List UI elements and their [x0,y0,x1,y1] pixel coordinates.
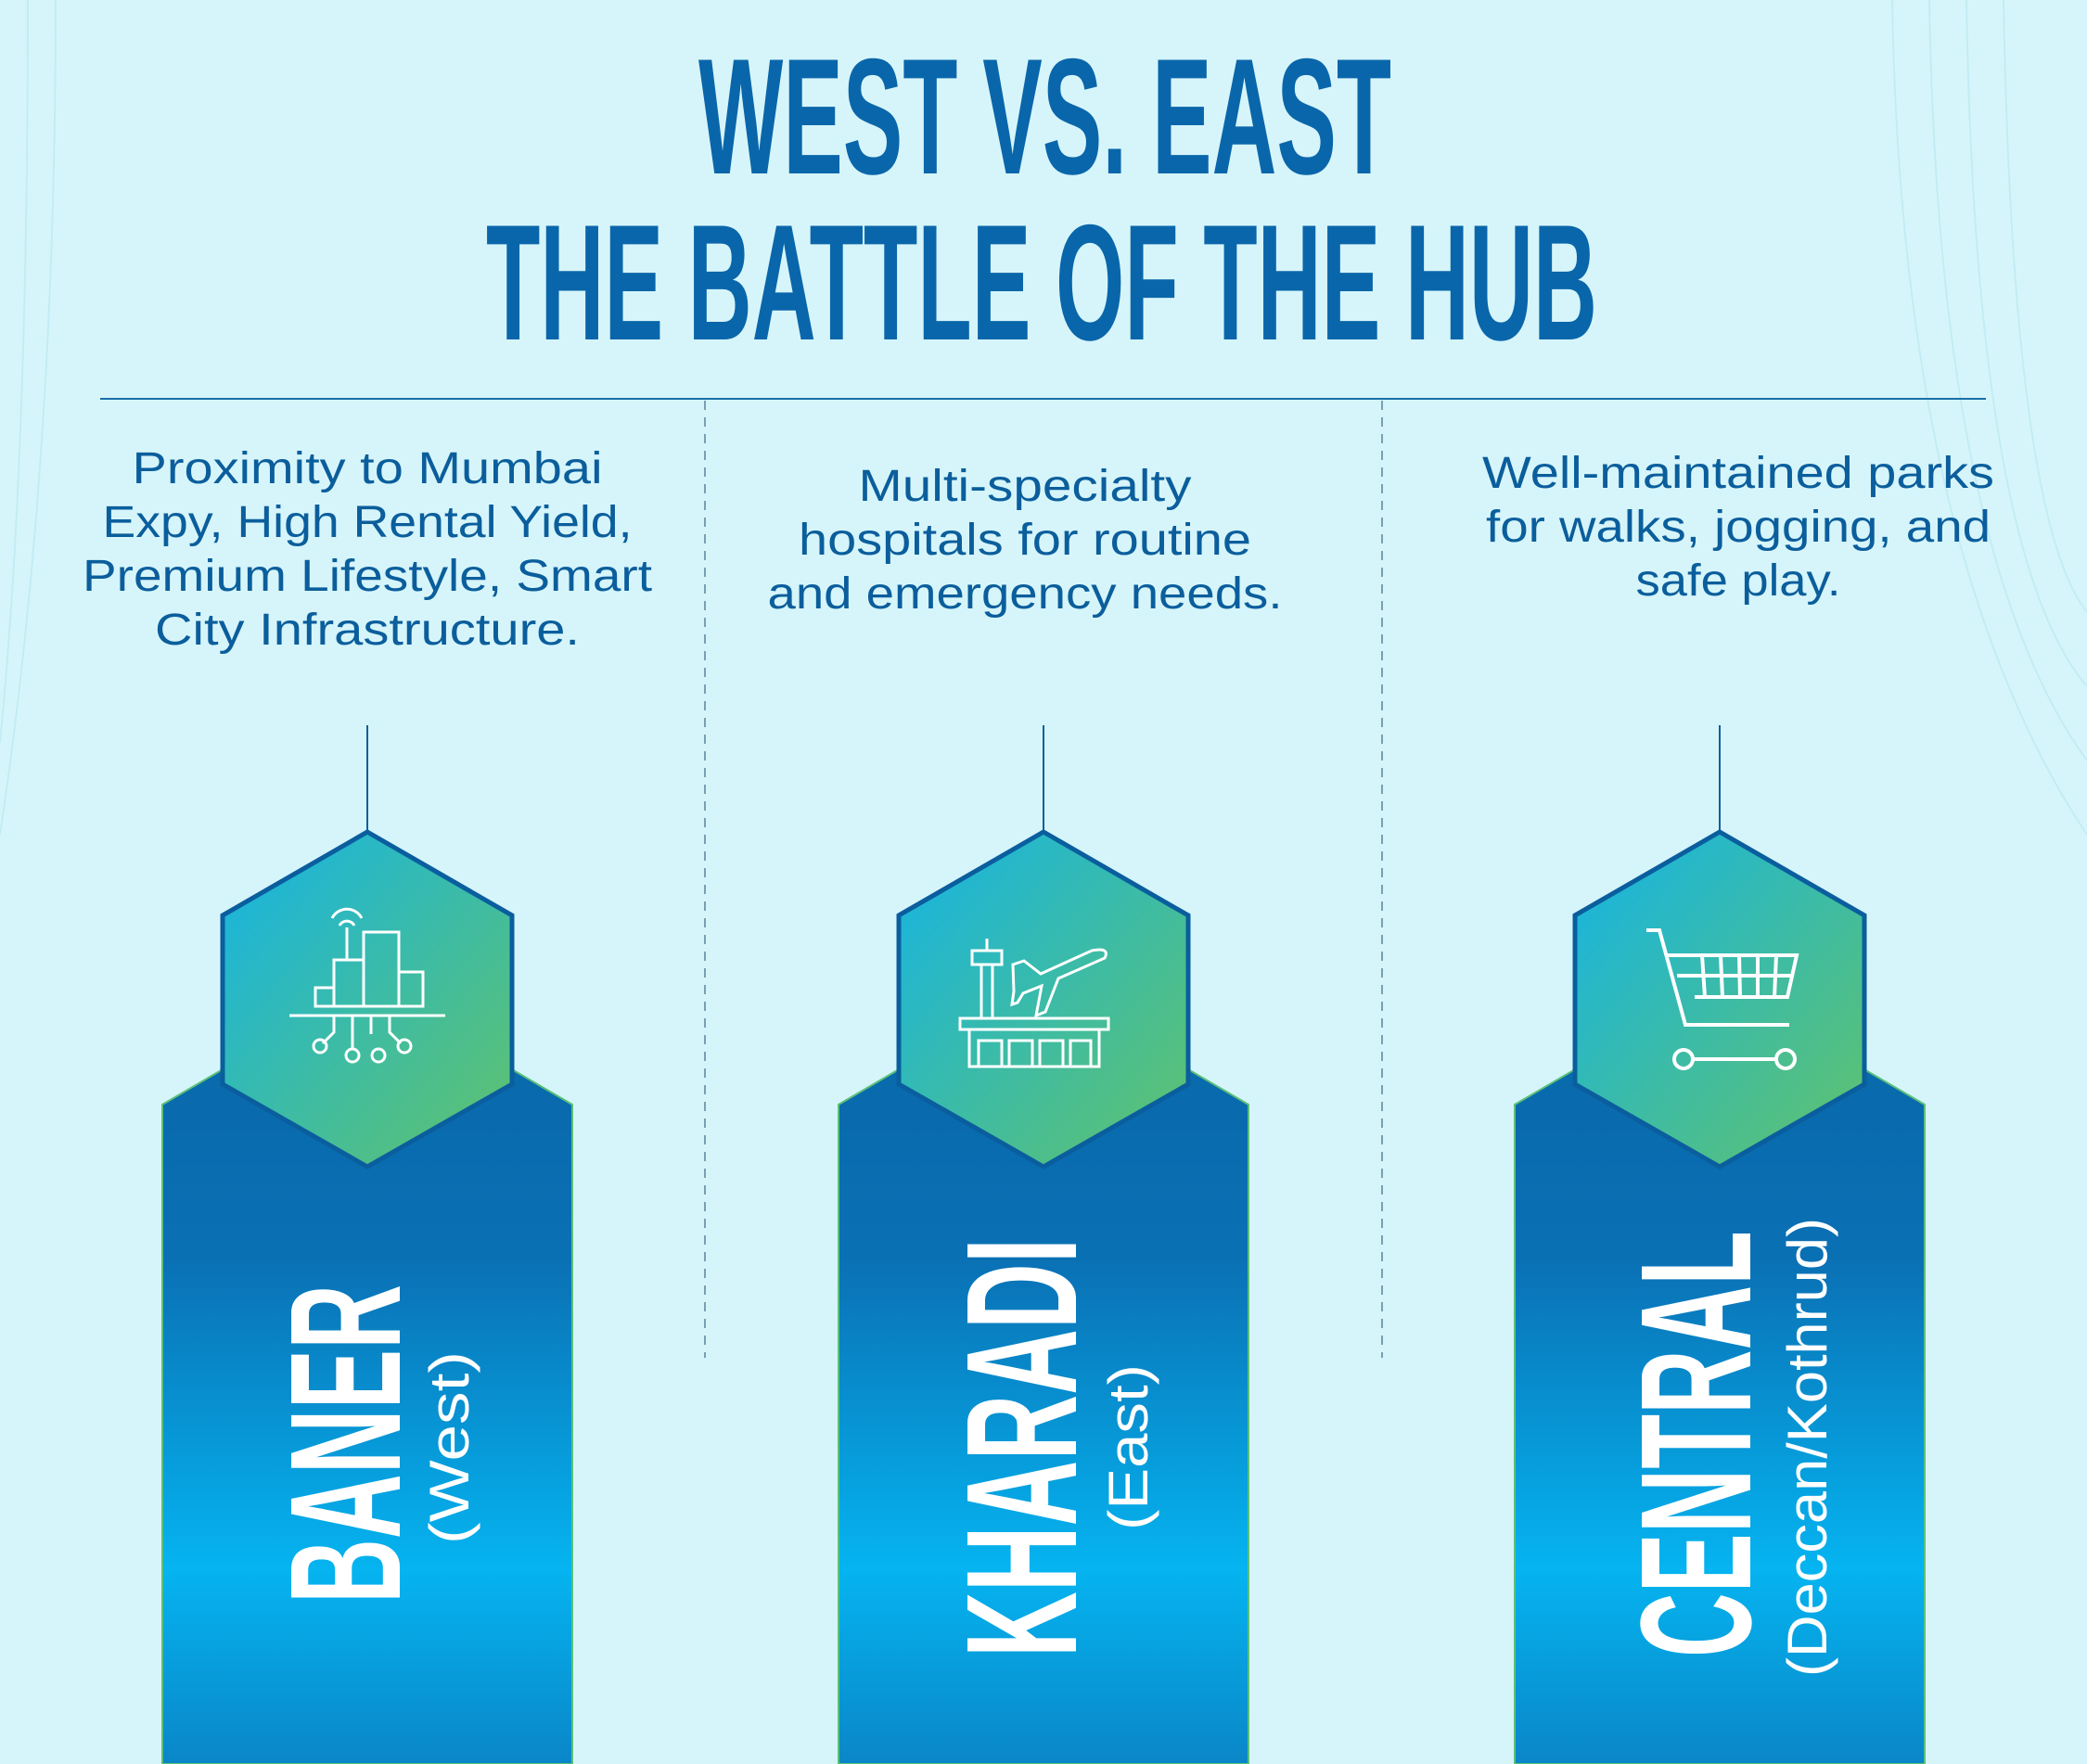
text: baner description: Premium Lifestyle, Smart [83,552,652,601]
text: central description: for walks, jogging, and [1486,503,1991,552]
text: baner description: Proximity to Mumbai [132,444,603,493]
column: baner: (West) [418,1351,480,1544]
icon: smart city [289,909,445,1062]
column: kharadi [839,725,1248,1764]
text: central description: safe play. [1636,556,1840,606]
column: baner: BANER [258,1285,434,1604]
text: baner description: Expy, High Rental Yield, [102,498,633,547]
text: baner description [83,444,652,655]
text: central description: Well-maintained parks [1482,449,1994,498]
column: baner [162,725,572,1764]
text: central description [1482,449,1994,606]
icon: shopping cart [1646,930,1797,1068]
title: WEST VS. EAST [698,24,1391,209]
title [486,24,1597,375]
column: central: CENTRAL [1608,1231,1785,1657]
text: baner description: City Infrastructure. [155,606,580,655]
column: central: (Deccan/Kothrud) [1776,1218,1838,1677]
text: kharadi description: Multi-specialty [859,462,1191,511]
text: kharadi description: and emergency needs. [768,569,1282,619]
column: central [1515,725,1925,1764]
text: kharadi description [768,462,1282,619]
icon: airport [960,939,1108,1067]
column: kharadi: KHARADI [934,1238,1110,1657]
column: kharadi: (East) [1097,1364,1159,1530]
text: kharadi description: hospitals for routine [799,516,1251,565]
